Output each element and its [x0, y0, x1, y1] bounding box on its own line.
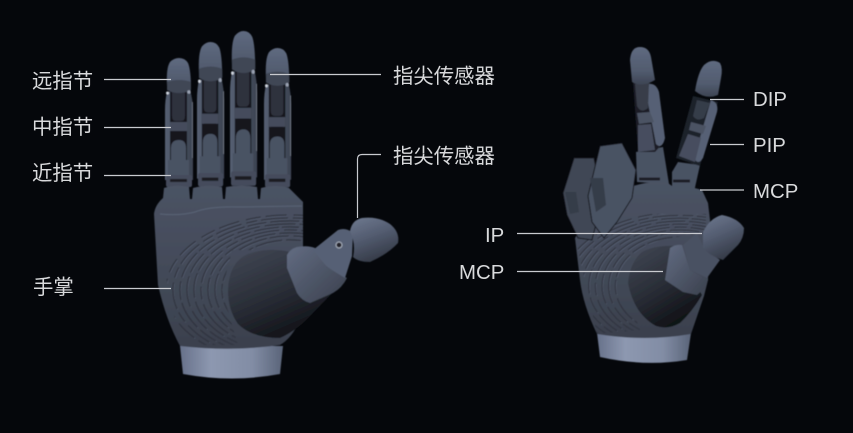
label: fingertip sensor thumb: 指尖传感器 [393, 145, 495, 168]
infographic: robotic hand anatomy [32, 30, 798, 380]
thumb sensor pin [336, 242, 342, 248]
thumb pad [228, 250, 340, 338]
label: MCP lower: MCP [459, 262, 504, 284]
palm upper ridge [160, 206, 302, 215]
outer curled finger [563, 158, 602, 240]
label: proximal phalanx: 近指节 [32, 162, 93, 185]
right knuckle joints [639, 179, 690, 181]
label: palm: 手掌 [33, 276, 74, 299]
curled fingertip detail [565, 178, 606, 214]
right thumb link [683, 233, 720, 278]
label: PIP: PIP [753, 135, 786, 157]
label: IP: IP [485, 225, 504, 247]
leader lines [104, 74, 744, 288]
label: distal phalanx: 远指节 [32, 70, 93, 93]
right wrist cuff [597, 333, 691, 363]
ring finger [230, 31, 257, 186]
palm body [154, 186, 303, 349]
label: MCP upper: MCP [753, 181, 798, 203]
labels: right hand [459, 89, 798, 284]
right thumb pad [628, 246, 702, 327]
label: fingertip sensor top: 指尖传感器 [393, 65, 495, 88]
left hand: open palm [154, 31, 415, 378]
right thumb base joint [665, 245, 708, 295]
thumb middle link [313, 229, 353, 278]
little finger [264, 48, 291, 187]
right fingerprint ridges [578, 214, 706, 332]
label: middle phalanx: 中指节 [32, 116, 93, 139]
raised middle finger [672, 61, 722, 192]
index finger [165, 58, 193, 187]
labels: left hand [32, 65, 495, 299]
raised index finger [630, 47, 669, 184]
middle finger [197, 42, 224, 186]
right palm body [575, 182, 710, 338]
thumb fingertip [350, 218, 398, 262]
thumb base joint [287, 246, 347, 303]
label: DIP: DIP [753, 89, 787, 111]
right thumb fingertip [703, 215, 744, 260]
palm fingerprint ridges [166, 214, 303, 344]
inner curled finger [588, 143, 636, 238]
wrist cuff [180, 346, 283, 378]
right hand: victory gesture [562, 46, 744, 364]
